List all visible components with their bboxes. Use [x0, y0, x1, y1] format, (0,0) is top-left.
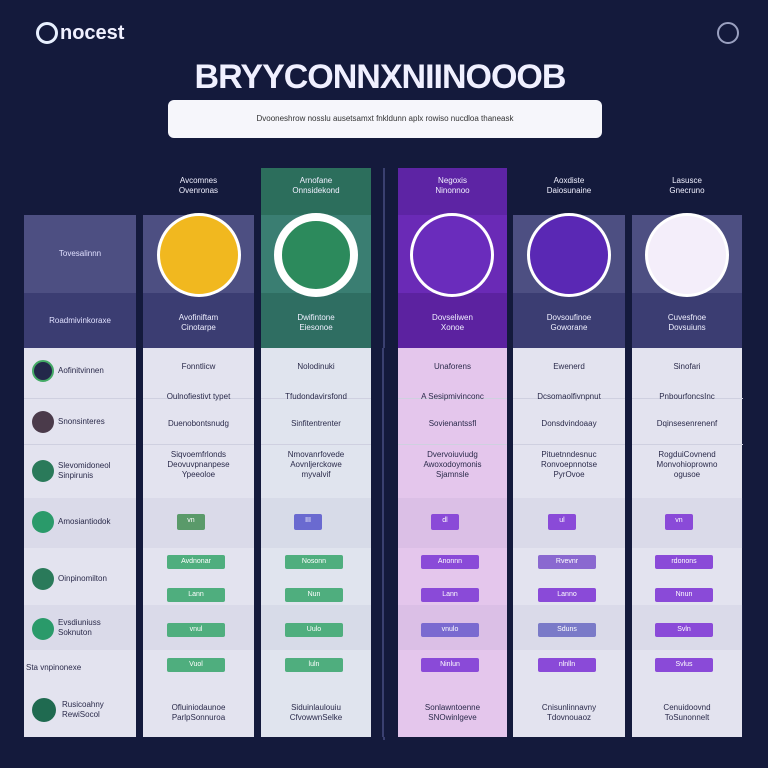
icon: white circle: [645, 213, 729, 297]
row labels: Aofinitvinnen: [58, 366, 104, 375]
cell texts per column: PyrOvoe: [553, 470, 585, 479]
column 4: Daiosunaine: [547, 186, 591, 195]
badges: Lanno: [557, 591, 577, 598]
cell texts per column: Sinfitentrenter: [291, 419, 341, 428]
badges: vn: [675, 517, 683, 524]
table row shading: [24, 348, 743, 737]
icon: green shield: [274, 213, 358, 297]
cell texts per column: Dqinsesenrenenf: [657, 419, 717, 428]
cell texts per column: Sovienantssfl: [429, 419, 476, 428]
column 2 green: Eiesonoe: [299, 323, 333, 332]
cell texts per column: Nolodinuki: [297, 362, 335, 371]
cell texts per column: Deovuvpnanpese: [167, 460, 230, 469]
row labels: Soknuton: [58, 628, 92, 637]
column 4: Aoxdiste: [554, 176, 584, 185]
cell texts per column: ogusoe: [674, 470, 700, 479]
column 2 green: Dwifintone: [297, 313, 335, 322]
column 5: Gnecruno: [669, 186, 705, 195]
column 4: Dovsoufinoe: [547, 313, 591, 322]
cell texts per column: Pituetnndesnuc: [541, 450, 597, 459]
column 1 yellow: Ovenronas: [179, 186, 218, 195]
cell texts per column: Ypeeoloe: [182, 470, 215, 479]
cell texts per column: myvalvif: [302, 470, 330, 479]
badges: nlnlln: [559, 661, 575, 668]
cell texts per column: PnbourfoncsInc: [659, 392, 715, 401]
badges: III: [305, 517, 311, 524]
cell texts per column: Monvohioprowno: [657, 460, 717, 469]
cell texts per column: Donsdvindoaay: [541, 419, 597, 428]
column 3 purple: Dovseliwen: [432, 313, 473, 322]
row labels: [26, 360, 110, 722]
column 2 green: Arnofane: [300, 176, 332, 185]
column 1 yellow: [143, 176, 254, 737]
icon: top right: [717, 22, 739, 44]
row labels: Rusicoahny: [62, 700, 104, 709]
badges: Lann: [442, 591, 458, 598]
column 1 yellow: Cinotarpe: [181, 323, 216, 332]
cell texts per column: Cenuidoovnd: [663, 703, 711, 712]
cell texts per column: Dcsomaolfivnpnut: [537, 392, 601, 401]
column 5: Cuvesfnoe: [668, 313, 706, 322]
badges: rdonons: [671, 558, 697, 565]
icon: purple mask: [410, 213, 494, 297]
badges: vn: [187, 517, 195, 524]
cell texts per column: ParlpSonnuroa: [172, 713, 225, 722]
cell texts per column: Sjamnsle: [436, 470, 469, 479]
cell texts per column: Nmovanrfovede: [288, 450, 344, 459]
column 1 yellow: Avofiniftam: [179, 313, 218, 322]
row labels: Slevomidoneol: [58, 461, 110, 470]
badges: Svln: [677, 626, 691, 633]
cell texts per column: [167, 362, 718, 722]
cell texts per column: Ofluiniodaunoe: [172, 703, 225, 712]
column 2 green: Onnsidekond: [292, 186, 340, 195]
badges: Anonnn: [438, 558, 462, 565]
badges: Uulo: [307, 626, 321, 633]
row labels: Oinpinomilton: [58, 574, 107, 583]
column 5: [632, 176, 742, 737]
title: BRYYCONNXNIINOOOB: [195, 58, 565, 96]
cell texts per column: A Sesipmivinconc: [421, 392, 484, 401]
row labels: Amosiantiodok: [58, 517, 110, 526]
badges: vnulo: [442, 626, 458, 633]
icon: yellow coin: [157, 213, 241, 297]
column 3 purple: Xonoe: [441, 323, 464, 332]
column 4: Goworane: [551, 323, 587, 332]
badges: dl: [442, 517, 448, 524]
cell texts per column: Cnisunlinnavny: [542, 703, 596, 712]
cell texts per column: RogduiCovnend: [658, 450, 716, 459]
badges: Nun: [308, 591, 320, 598]
cell texts per column: Tdovnouaoz: [547, 713, 591, 722]
row labels: Sta vnpinonexe: [26, 663, 81, 672]
cell texts per column: Unaforens: [434, 362, 471, 371]
column 3 purple: Ninonnoo: [435, 186, 470, 195]
cell texts per column: SNOwinlgeve: [428, 713, 477, 722]
cell texts per column: CfvowwnSelke: [290, 713, 342, 722]
row labels: Snonsinteres: [58, 417, 105, 426]
subtitle box: [168, 100, 602, 138]
badges: Vuol: [189, 661, 203, 668]
column 2 green: [261, 168, 371, 737]
row labels: Sinpirunis: [58, 471, 93, 480]
cell texts per column: Aovnljerckowe: [290, 460, 342, 469]
cell texts per column: Duenobontsnudg: [168, 419, 229, 428]
badges: [167, 514, 713, 672]
column 4: [513, 176, 625, 737]
badges: Ninlun: [440, 661, 460, 668]
cell texts per column: Ewenerd: [553, 362, 585, 371]
icon: purple tree: [527, 213, 611, 297]
cell texts per column: Sonlawntoenne: [425, 703, 480, 712]
column 3 purple: Negoxis: [438, 176, 467, 185]
divider: [383, 168, 385, 740]
badges: Avdnonar: [181, 558, 211, 565]
column 3 purple: [398, 168, 507, 737]
cell texts per column: Siduinlaulouiu: [291, 703, 341, 712]
label column: [24, 215, 136, 737]
cell texts per column: Dvervoiuviudg: [427, 450, 478, 459]
column 5: Lasusce: [672, 176, 702, 185]
badges: vnul: [190, 626, 202, 633]
label column: Tovesalinnn: [59, 249, 101, 258]
cell texts per column: ToSunonnelt: [665, 713, 709, 722]
cell texts per column: Tfudondavirsfond: [285, 392, 347, 401]
cell texts per column: Fonntlicw: [182, 362, 215, 371]
badges: Rvevnr: [556, 558, 578, 565]
badges: Nosonn: [302, 558, 326, 565]
cell texts per column: Oulnofiestivt typet: [167, 392, 230, 401]
logo: nocest: [60, 22, 124, 44]
cell texts per column: Awoxodoymonis: [423, 460, 482, 469]
row labels: Evsdiuniuss: [58, 618, 101, 627]
label column: Roadmivinkoraxe: [49, 316, 111, 325]
column 5: Dovsuiuns: [668, 323, 706, 332]
cell texts per column: Sinofari: [673, 362, 701, 371]
cell texts per column: Ronvoepnnotse: [541, 460, 597, 469]
row labels: RewiSocol: [62, 710, 100, 719]
badges: Lann: [188, 591, 204, 598]
cell texts per column: Siqvoemfrlonds: [171, 450, 226, 459]
badges: luln: [309, 661, 319, 668]
subtitle box: Dvooneshrow nosslu ausetsamxt fnkldunn aplx rowiso nucdloa thaneask: [256, 114, 514, 123]
badges: Svlus: [675, 661, 693, 668]
badges: Nnun: [676, 591, 692, 598]
badges: ul: [559, 517, 565, 524]
column 1 yellow: Avcomnes: [180, 176, 217, 185]
badges: Sduns: [557, 626, 577, 633]
